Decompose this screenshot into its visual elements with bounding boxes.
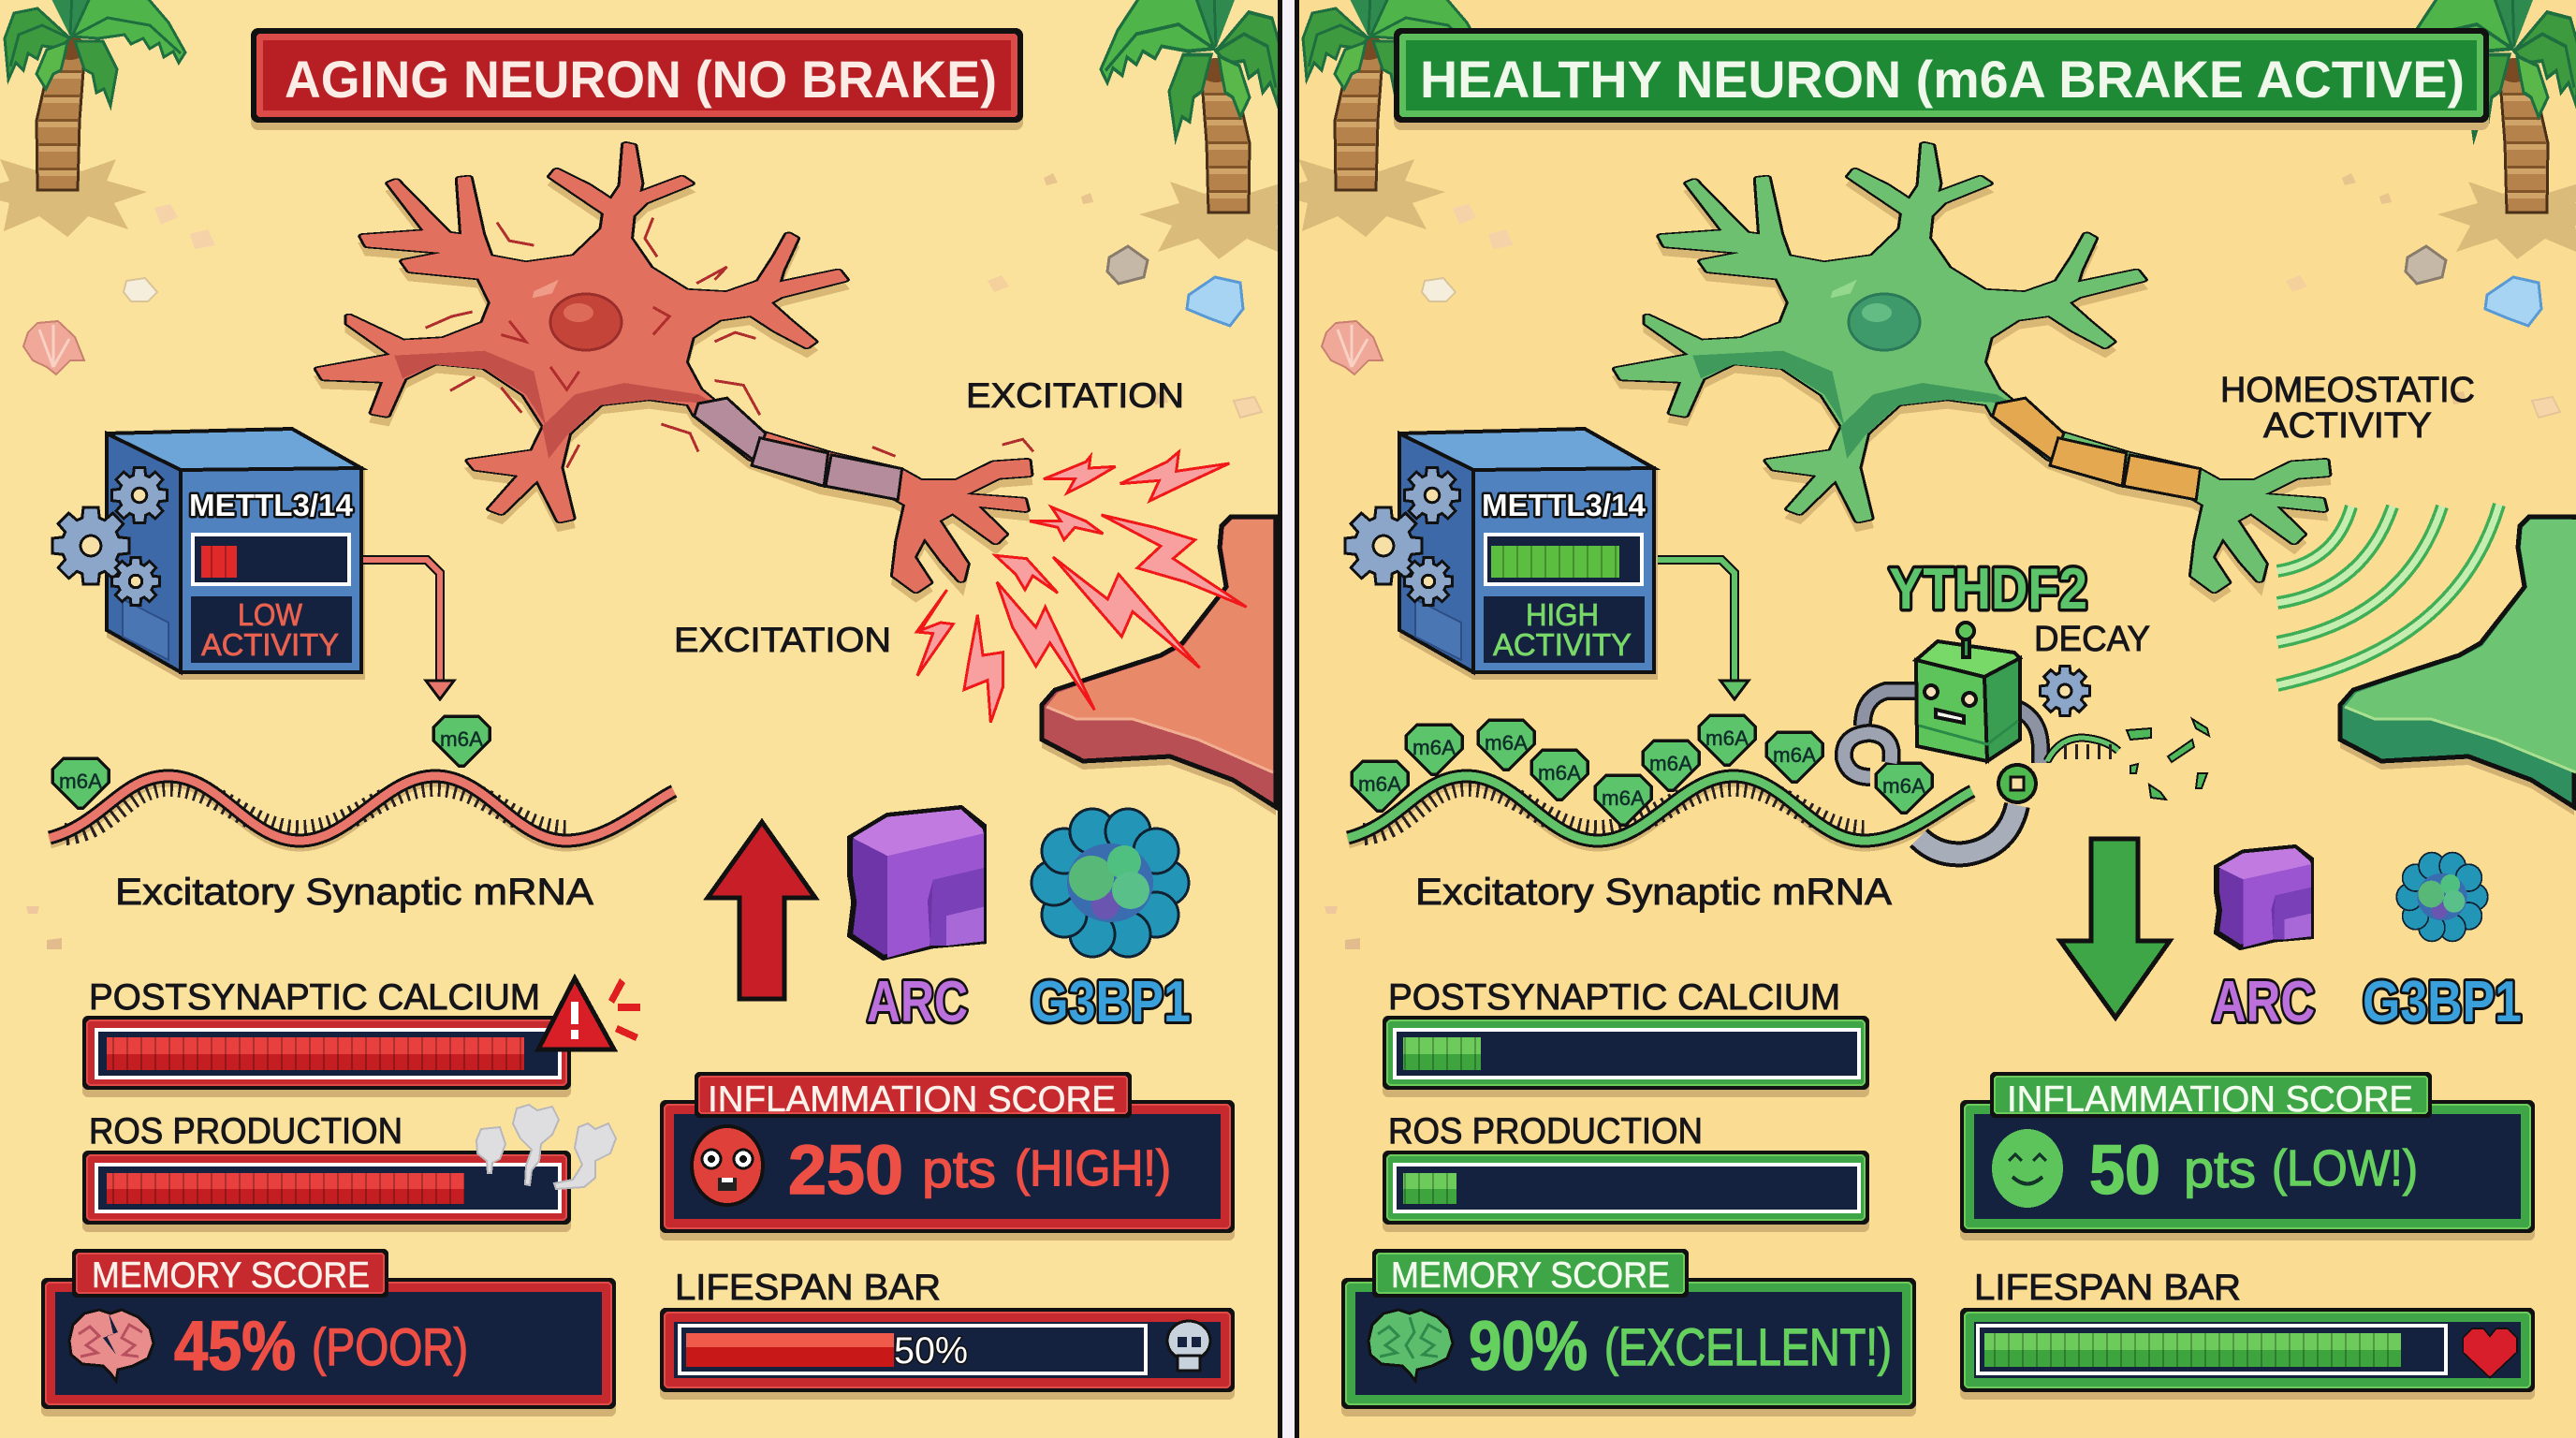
palm tree left [0, 0, 185, 237]
icon: smiling face [1992, 1129, 2063, 1208]
postsynaptic terminal [2340, 517, 2576, 815]
panel: aging neuron [0, 0, 1317, 1438]
homeostatic activity waves [2277, 505, 2499, 685]
m6A tag [1699, 715, 1755, 765]
neuron [1617, 144, 2327, 599]
label: postsynaptic calcium: POSTSYNAPTIC CALCIUM [89, 977, 540, 1018]
bar: lifespan [1960, 1308, 2535, 1400]
panel: memory score [1341, 1249, 1916, 1416]
METTL3/14 machine: METTL3/14 [1482, 488, 1647, 522]
m6A tag [1352, 761, 1408, 811]
title banner [1394, 28, 2489, 130]
palm tree left [1267, 0, 1484, 237]
icon: skull [1167, 1321, 1210, 1371]
m6A tag [1406, 725, 1462, 774]
icon: heart [2463, 1328, 2517, 1378]
divider [1278, 0, 1299, 1438]
score value: 50 [2089, 1131, 2160, 1209]
G3BP1 protein [1032, 809, 1189, 957]
label: lifespan bar: LIFESPAN BAR [1974, 1268, 2241, 1308]
palm tree right [1099, 0, 1278, 259]
m6A tag [1595, 775, 1651, 825]
label: G3BP1: G3BP1 [1031, 970, 1191, 1034]
m6A tag: m6A [440, 727, 483, 751]
label: YTHDF2: YTHDF2 [1889, 557, 2087, 622]
label: homeostatic activity: ACTIVITY [2263, 406, 2432, 446]
icon: healthy brain [1368, 1310, 1453, 1381]
myelin sheath [695, 398, 902, 500]
m6A tag [52, 758, 109, 808]
nucleus [1849, 294, 1920, 350]
score value: 45% [174, 1307, 296, 1385]
label: ARC: ARC [867, 970, 968, 1034]
title banner: AGING NEURON (NO BRAKE) [285, 50, 997, 109]
score value: (HIGH!) [1015, 1140, 1171, 1196]
label: postsynaptic calcium: POSTSYNAPTIC CALCIUM [1388, 977, 1840, 1018]
m6A tag: m6A [1602, 786, 1645, 810]
decaying mRNA fragments [2047, 719, 2209, 800]
METTL3/14 machine: ACTIVITY [201, 627, 339, 662]
m6A tag [1876, 763, 1932, 813]
warning icon [538, 978, 640, 1049]
palm tree right [2399, 0, 2576, 259]
m6A tag: m6A [1358, 772, 1401, 796]
METTL3/14 machine: HIGH [1526, 597, 1599, 632]
G3BP1 protein [2396, 853, 2488, 941]
label: homeostatic activity [2220, 371, 2475, 446]
m6A tag: m6A [1705, 726, 1749, 750]
stress squiggles [426, 218, 1033, 468]
score value: (POOR) [312, 1317, 468, 1376]
label: excitation bottom: EXCITATION [674, 621, 891, 659]
ARC protein [850, 808, 984, 958]
arrow: machine to mRNA [363, 560, 454, 699]
m6A tag [1643, 741, 1699, 790]
ARC protein [2217, 847, 2311, 947]
icon: damaged brain [69, 1310, 154, 1381]
arrow: down [2060, 839, 2170, 1018]
label: ARC: ARC [2212, 970, 2315, 1034]
METTL3/14 machine: METTL3/14 [189, 488, 354, 522]
mRNA strand [1348, 715, 1972, 844]
m6A tag: m6A [1649, 752, 1692, 775]
m6A tag [433, 716, 490, 766]
m6A tag: m6A [1882, 774, 1925, 798]
robot arms [1844, 691, 2041, 854]
label: homeostatic activity: HOMEOSTATIC [2220, 371, 2475, 410]
label: excitation top: EXCITATION [966, 376, 1184, 415]
bar: ROS production [82, 1151, 571, 1232]
bar: ROS production [1383, 1151, 1869, 1232]
label: decay: DECAY [2034, 620, 2150, 659]
bar: postsynaptic calcium [1383, 1016, 1869, 1097]
smoke icon [476, 1105, 616, 1189]
mRNA label: Excitatory Synaptic mRNA [115, 872, 593, 913]
label: ROS production: ROS PRODUCTION [1388, 1111, 1703, 1152]
arrow: machine to mRNA [1658, 560, 1749, 699]
grey cog [2041, 667, 2089, 715]
green cog [1998, 765, 2036, 802]
m6A tag [1478, 720, 1534, 770]
m6A tag: m6A [1538, 761, 1581, 785]
panel: memory score [41, 1249, 616, 1416]
myelin sheath [1993, 398, 2201, 500]
mRNA strand [50, 716, 674, 844]
m6A tag [1531, 750, 1588, 800]
score value: pts [2184, 1139, 2256, 1198]
m6A tag: m6A [1412, 736, 1456, 759]
excitation lightning bolts [916, 452, 1247, 723]
panel: memory score: MEMORY SCORE [1391, 1255, 1670, 1296]
label: ROS production: ROS PRODUCTION [89, 1111, 402, 1152]
score value: 250 [788, 1131, 903, 1209]
bar: lifespan: 50% [894, 1330, 968, 1372]
beach details [23, 173, 1262, 949]
label: lifespan bar: LIFESPAN BAR [675, 1268, 941, 1308]
nucleus [550, 294, 622, 350]
postsynaptic terminal [1042, 517, 1276, 815]
score value: (EXCELLENT!) [1604, 1317, 1892, 1376]
YTHDF2 robot [1844, 623, 2089, 854]
METTL3/14 machine: ACTIVITY [1493, 627, 1632, 662]
bar: lifespan [660, 1308, 1235, 1400]
beach details [1322, 173, 2560, 949]
m6A tag: m6A [59, 770, 102, 793]
panel: inflammation score [660, 1072, 1235, 1240]
neuron [319, 144, 1033, 599]
panel: inflammation score: INFLAMMATION SCORE [2007, 1079, 2413, 1120]
score value: pts [922, 1139, 996, 1198]
mRNA label: Excitatory Synaptic mRNA [1415, 872, 1892, 913]
METTL3/14 machine: LOW [238, 597, 303, 632]
m6A tag [1766, 732, 1822, 782]
panel: memory score: MEMORY SCORE [92, 1255, 370, 1296]
m6A tag: m6A [1773, 743, 1816, 767]
label: G3BP1: G3BP1 [2363, 970, 2522, 1034]
icon: worried face [692, 1126, 763, 1205]
METTL3/14 machine [1345, 429, 1658, 680]
score value: 90% [1469, 1307, 1588, 1385]
panel: inflammation score: INFLAMMATION SCORE [708, 1079, 1116, 1120]
title banner [251, 28, 1023, 130]
panel: inflammation score [1960, 1072, 2535, 1240]
score value: (LOW!) [2272, 1140, 2418, 1196]
robot body [1916, 623, 2020, 761]
bar: postsynaptic calcium [82, 1016, 571, 1097]
title banner: HEALTHY NEURON (m6A BRAKE ACTIVE) [1420, 50, 2465, 109]
arrow: up [708, 822, 815, 999]
panel: healthy neuron [1267, 0, 2576, 1438]
m6A tag: m6A [1485, 731, 1528, 755]
METTL3/14 machine [52, 429, 365, 680]
